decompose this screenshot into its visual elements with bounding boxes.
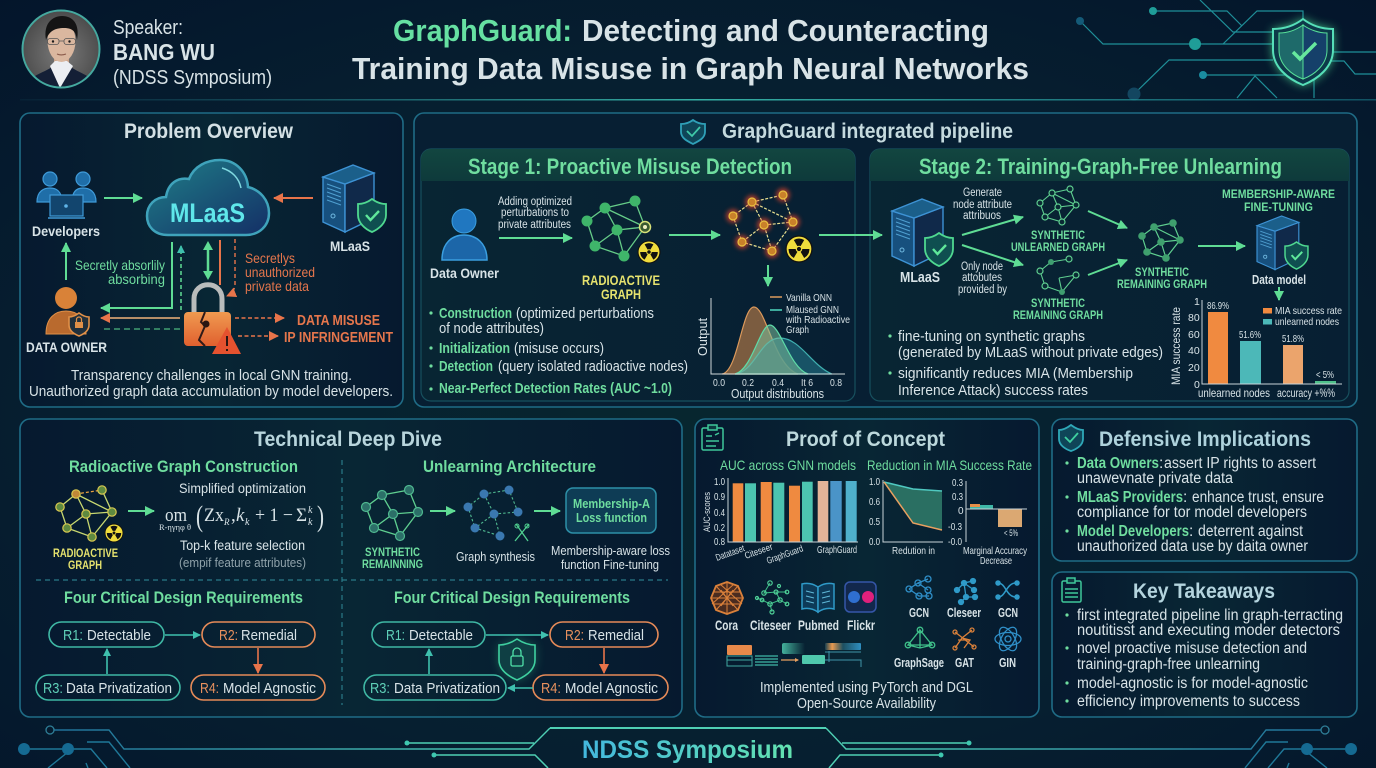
chart: synthetic unlearned graph <box>1037 186 1079 225</box>
label: synthetic remaining: REMAINNING <box>362 557 423 571</box>
icon: defensive shield <box>1059 425 1083 451</box>
icon: developers <box>37 172 96 218</box>
icon: GAT <box>953 628 976 650</box>
formula: om <box>165 505 187 526</box>
panel: defensive implications <box>1052 419 1357 561</box>
heading: radioactive graph construction: Radioactive Graph Construction <box>69 457 298 476</box>
text: only node attributes <box>958 261 1007 296</box>
text: problem summary: Unauthorized graph data accumulation by model developers. <box>29 383 393 400</box>
chart: marginal accuracy: 0.3 <box>952 492 963 503</box>
header circuit decoration <box>1076 0 1376 100</box>
label: MLaaS server: MLaaS <box>330 238 370 254</box>
pill: R3 right: R3: <box>370 680 390 697</box>
pill: R3 right <box>364 675 506 700</box>
formula: k <box>236 505 245 526</box>
label: secretly unauthorized: Secretlys <box>245 250 295 266</box>
chart: synthetic remaining graph lower <box>1037 256 1079 295</box>
box: membership loss function <box>566 488 656 533</box>
chart: MIA success rate bars: unlearned nodes <box>1275 316 1339 328</box>
text: implementation note: Open-Source Availability <box>797 695 936 712</box>
text: top-k feature selection: (empif feature attributes) <box>179 556 306 570</box>
text: stage 2 bullets: Inference Attack) success rates <box>898 382 1088 399</box>
label: data owner: DATA OWNER <box>26 339 107 355</box>
label: developers: Developers <box>32 223 100 239</box>
chart: MIA success rate bars: 86.9% <box>1207 300 1229 312</box>
box: membership loss function: Loss function <box>576 510 647 525</box>
label: synthetic remaining graph lower: SYNTHETIC <box>1031 296 1085 310</box>
arrow: graph to formula <box>128 510 154 512</box>
title: GraphGuard: <box>393 13 572 48</box>
labels: models bottom <box>894 656 1016 670</box>
label: radioactive graph <box>582 272 660 302</box>
icon: data owner <box>46 287 89 336</box>
text: stage 1 bullets: Construction <box>439 305 512 322</box>
label: data owner: Data Owner <box>430 265 499 281</box>
label: synthetic remaining graph lower <box>1013 296 1103 322</box>
text: stage 2 bullets: fine-tuning on synthetic graphs <box>898 328 1085 345</box>
pill: R2 right: R2: <box>565 627 584 644</box>
text: generate node attribute: attribuos <box>963 210 1001 222</box>
arrow: stage 1 to stage 2 <box>819 234 882 236</box>
text: stage 1 bullets: (query isolated radioactive nodes) <box>498 358 688 375</box>
chart: radioactive graph small <box>56 486 123 542</box>
text: generate node attribute: node attribute <box>953 199 1012 211</box>
chart: MIA reduction lines: 0.6 <box>869 497 880 508</box>
arrow: to fine tuning <box>1198 245 1245 247</box>
chart: output distributions: Mlaused GNN <box>786 304 839 316</box>
text: problem summary <box>29 367 393 400</box>
heading: AUC chart: AUC across GNN models <box>720 457 856 473</box>
chart: output distributions: 0.8 <box>830 377 842 389</box>
text: stage 1 bullets: Near-Perfect Detection Rates (AUC ~1.0) <box>439 380 672 397</box>
panel: key takeaways <box>1052 572 1357 717</box>
chart: AUC bars: 0.2 <box>714 523 725 534</box>
label: synthetic unlearned graph: UNLEARNED GRAPH <box>1011 240 1105 254</box>
chart: output distributions: 0.0 <box>713 377 725 389</box>
text: takeaway bullets: training-graph-free unlearning <box>1077 656 1260 673</box>
text: stage 2 bullets <box>888 328 1163 399</box>
icon: MLaaS cloud <box>147 160 269 235</box>
heading: problem overview: Problem Overview <box>124 120 294 143</box>
chart: synthetic remaining graph merged <box>1138 219 1184 262</box>
icon: MLaaS cloud: MLaaS <box>170 198 245 228</box>
pill: R4 right <box>533 675 668 700</box>
panel: integrated pipeline <box>414 113 1357 407</box>
pill: R1 right: Detectable <box>409 627 473 644</box>
label: secretly unauthorized: private data <box>245 278 309 294</box>
text: implementation note <box>760 679 973 712</box>
chart: AUC bars: 0.9 <box>714 492 725 503</box>
labels: models bottom: GraphSage <box>894 656 944 670</box>
text: defensive bullets: compliance for tor model developers <box>1077 504 1307 521</box>
icon: GCN 1 <box>906 576 932 599</box>
icon: Pubmed <box>802 583 834 612</box>
arrow: graph to chart <box>767 265 769 286</box>
pill: R2 <box>202 622 315 647</box>
chart: triggered radioactive graph <box>726 188 812 262</box>
pill: R2: R2: <box>219 627 238 644</box>
text: defensive bullets: deterrent against <box>1198 523 1304 540</box>
text: stage 1 bullets: of node attributes) <box>439 320 544 337</box>
label: secretly absorbing: Secretly absorlily <box>75 257 165 273</box>
chart: MIA success rate bars: 51.6% <box>1239 329 1261 341</box>
text: defensive bullets: : <box>1183 489 1187 506</box>
chart: AUC bars <box>702 477 858 567</box>
pill: R4: Model Agnostic <box>223 680 316 697</box>
panel: problem overview <box>20 113 403 407</box>
text: defensive bullets: : <box>1159 455 1163 472</box>
pill: R4 right: Model Agnostic <box>565 680 658 697</box>
formula: + 1 − <box>255 505 293 526</box>
text: only node attributes: Only node <box>961 261 1003 273</box>
chart: output distributions <box>696 292 850 401</box>
title: Detecting and Counteracting <box>582 13 989 48</box>
formula <box>159 500 324 533</box>
chart: MIA success rate bars: 80 <box>1188 312 1200 324</box>
chart: AUC bars: 0.4 <box>714 508 725 519</box>
label: misuse outcomes <box>284 313 393 346</box>
chart: graph synthesis <box>464 486 529 541</box>
chart: synthetic remaining graph architecture <box>362 486 422 540</box>
label: synthetic remaining graph merged: REMAINING GRAPH <box>1117 277 1207 291</box>
icon: pipeline shield <box>681 120 705 144</box>
icon: GraphSage <box>905 627 935 648</box>
pill: R1: Detectable <box>87 627 151 644</box>
label: data model: Data model <box>1252 272 1306 287</box>
labels: models top: GCN <box>998 606 1018 620</box>
icon: key takeaways clipboard <box>1062 578 1081 602</box>
chart: MIA success rate bars: 60 <box>1188 329 1200 341</box>
text: adding perturbations: Adding optimized <box>498 196 572 208</box>
label: secretly unauthorized: unauthorized <box>245 264 315 280</box>
text: defensive bullets: assert IP rights to assert <box>1164 455 1317 472</box>
arrows: left flow <box>107 635 258 674</box>
icon: clipboard <box>702 425 723 450</box>
chart: AUC bars: 1.0 <box>714 477 725 488</box>
heading: pipeline: GraphGuard integrated pipeline <box>722 120 1013 143</box>
arrow: developers to cloud <box>104 197 142 199</box>
panel: stage 1 <box>421 149 855 401</box>
pill: R2 right: Remedial <box>588 627 644 644</box>
pill: R3: Data Privatization <box>66 680 172 697</box>
label: radioactive graph small: GRAPH <box>68 558 102 572</box>
label: radioactive graph: RADIOACTIVE <box>582 272 660 288</box>
arrow: server to cloud <box>274 197 313 199</box>
chart: marginal accuracy: 0.3 <box>952 478 963 489</box>
chart: MIA reduction lines: 0.5 <box>869 517 880 528</box>
footer banner <box>18 726 1357 768</box>
labels: models bottom: GIN <box>999 656 1016 670</box>
pill: R3: R3: <box>43 680 63 697</box>
arrow: owner to developers <box>65 243 67 280</box>
label: membership-aware fine-tuning <box>1222 187 1335 214</box>
icon: lock shield <box>499 639 535 680</box>
text: generate node attribute: Generate <box>963 187 1002 199</box>
pill: R1 right <box>372 622 485 647</box>
chart: output distributions: Graph <box>786 324 809 336</box>
label: radioactive graph small <box>53 546 118 572</box>
text: stage 2 bullets: (generated by MLaaS without private edges) <box>898 344 1163 361</box>
labels: datasets: Citeseer <box>750 617 791 633</box>
chart: MIA success rate bars: MIA success rate <box>1275 305 1342 317</box>
arrow: to graph synthesis <box>430 510 455 512</box>
label: synthetic remaining graph merged: SYNTHETIC <box>1135 265 1189 279</box>
pill: R2: Remedial <box>241 627 297 644</box>
icon: Cora <box>711 582 743 614</box>
pill: R1 right: R1: <box>386 627 405 644</box>
chart: MIA success rate bars: MIA success rate <box>1171 307 1183 385</box>
text: defensive bullets <box>1065 455 1324 555</box>
heading: unlearning architecture: Unlearning Architecture <box>423 457 596 476</box>
label: radioactive graph small: RADIOACTIVE <box>53 546 118 560</box>
heading: stage 1: Stage 1: Proactive Misuse Detection <box>468 154 792 179</box>
chart: output distributions: 0.2 <box>742 377 754 389</box>
formula: R-ηγηφ θ <box>159 523 191 532</box>
chart: MIA success rate bars: unlearned nodes <box>1198 386 1270 400</box>
chart: marginal accuracy <box>948 478 1028 567</box>
label: secretly absorbing: absorbing <box>108 271 165 287</box>
text: stage 1 bullets: Detection <box>439 358 493 375</box>
chart: radioactive graph <box>582 196 660 263</box>
formula: k <box>308 505 313 516</box>
arrows: cloud and lock flows <box>100 239 235 329</box>
icon: MLaaS server <box>892 199 953 266</box>
chart: AUC bars: GraphGuard <box>817 544 857 556</box>
formula: Zx <box>204 505 224 526</box>
label: misuse outcomes: IP INFRINGEMENT <box>284 330 393 346</box>
label: synthetic remaining graph lower: REMAINING GRAPH <box>1013 308 1103 322</box>
icon: broken lock <box>184 285 241 354</box>
chart: output distributions: Vanilla ONN <box>786 292 832 304</box>
text: defensive bullets: Model Developers <box>1077 523 1189 540</box>
chart: AUC bars: Datataset <box>714 543 746 564</box>
text: takeaway bullets: noutitisst and executing moder detectors <box>1077 622 1340 639</box>
label: radioactive graph: GRAPH <box>601 286 641 302</box>
speaker photo <box>22 10 100 92</box>
text: defensive bullets: unauthorized data use by daita owner <box>1077 538 1308 555</box>
chart: output distributions: Output <box>696 317 710 356</box>
speaker text: BANG WU <box>113 39 215 65</box>
label: membership-aware fine-tuning: MEMBERSHIP-AWARE <box>1222 187 1335 201</box>
chart: MIA reduction lines: 0.0 <box>869 537 880 548</box>
labels: datasets: Cora <box>715 617 738 633</box>
chart: MIA success rate bars: 0 <box>1194 379 1200 391</box>
label: synthetic remaining <box>362 545 423 571</box>
text: stage 1 bullets <box>429 305 688 397</box>
chart: marginal accuracy: < 5% <box>1004 528 1018 538</box>
chart: MIA success rate bars: < 5% <box>1316 369 1334 381</box>
text: takeaway bullets <box>1065 607 1343 710</box>
formula: k <box>245 517 250 528</box>
pill: R4 right: R4: <box>541 680 561 697</box>
label: MLaaS: MLaaS <box>900 269 940 286</box>
labels: models top <box>909 606 1018 620</box>
chart: MIA reduction lines <box>869 477 943 557</box>
label: misuse outcomes: DATA MISUSE <box>297 313 380 329</box>
chart: output distributions: 0.4 <box>772 377 784 389</box>
arrows: right flow <box>429 635 604 688</box>
chart: MIA success rate bars: 40 <box>1188 345 1200 357</box>
text: top-k feature selection <box>179 538 306 570</box>
arrow: owner to graph <box>499 237 572 239</box>
chart: marginal accuracy: -0.0 <box>948 537 962 548</box>
chart: MIA reduction lines: Redution in <box>892 545 935 557</box>
label: secretly absorbing <box>75 257 165 287</box>
labels: models top: GCN <box>909 606 929 620</box>
heading: requirements left: Four Critical Design Requirements <box>64 588 303 607</box>
pill: R3 <box>36 675 180 700</box>
text: stage 1 bullets: Initialization <box>439 340 510 357</box>
text: membership-aware loss: function Fine-tuning <box>561 557 659 572</box>
text: takeaway bullets: efficiency improvements to success <box>1077 693 1300 710</box>
label: synthetic unlearned graph: SYNTHETIC <box>1031 228 1085 242</box>
labels: models bottom: GAT <box>955 656 974 670</box>
chart: MIA success rate bars: 1 <box>1194 296 1200 308</box>
icon: data model server <box>1257 216 1308 270</box>
chart: MIA success rate bars: accuracy +%% <box>1277 386 1335 400</box>
pill: R1 <box>49 622 164 647</box>
chart: marginal accuracy: Marginal Accuracy <box>963 545 1028 557</box>
icon: Flickr <box>845 582 876 612</box>
label: synthetic remaining graph merged <box>1117 265 1207 291</box>
heading: defensive implications: Defensive Implications <box>1099 428 1311 451</box>
chart: marginal accuracy: -0.3 <box>948 522 962 533</box>
text: adding perturbations: private attributes <box>498 219 571 231</box>
text: stage 1 bullets: (misuse occurs) <box>514 340 604 357</box>
speaker text <box>113 17 272 89</box>
labels: models top: Cleseer <box>947 606 981 620</box>
footer text: NDSS Symposium <box>582 736 793 764</box>
heading: stage 2: Stage 2: Training-Graph-Free Unlearning <box>919 154 1282 179</box>
heading: technical deep dive: Technical Deep Dive <box>254 428 442 451</box>
chart: marginal accuracy: 0 <box>958 506 964 517</box>
text: takeaway bullets: model-agnostic is for model-agnostic <box>1077 675 1308 692</box>
label: synthetic unlearned graph <box>1011 228 1105 254</box>
labels: datasets: Flickr <box>847 617 875 633</box>
text: stage 2 bullets: significantly reduces MIA (Membership <box>898 365 1133 382</box>
icon: MLaaS server <box>323 165 386 232</box>
text: adding perturbations <box>498 196 572 231</box>
formula: R <box>223 517 230 527</box>
text: problem summary: Transparency challenges in local GNN training. <box>71 367 352 384</box>
arrow: to loss function <box>534 510 560 512</box>
text: takeaway bullets: first integrated pipeline lin graph-terracting <box>1077 607 1343 624</box>
title <box>352 13 1029 86</box>
text: only node attributes: provided by <box>958 284 1007 296</box>
formula: k <box>308 517 313 528</box>
chart: AUC bars: 0.8 <box>714 537 725 548</box>
formula: ) <box>317 500 324 533</box>
icon: GCN 2 <box>996 581 1019 599</box>
label: membership-aware fine-tuning: FINE-TUNING <box>1244 200 1313 214</box>
heading: key takeaways: Key Takeaways <box>1133 580 1275 603</box>
arrows: server to synthetic graphs <box>962 217 1023 265</box>
speaker text: Speaker: <box>113 17 183 39</box>
labels: datasets: Pubmed <box>798 617 839 633</box>
pill: R3 right: Data Privatization <box>394 680 500 697</box>
chart: marginal accuracy: Decrease <box>980 555 1012 567</box>
text: only node attributes: attobutes <box>962 272 1002 284</box>
text: membership-aware loss: Membership-aware loss <box>551 543 670 558</box>
label: synthetic remaining: SYNTHETIC <box>365 545 420 559</box>
text: top-k feature selection: Top-k feature selection <box>180 538 305 553</box>
chart: output distributions: It 6 <box>801 377 813 389</box>
arrows: misuse outcomes <box>235 318 284 336</box>
chart: output distributions: Output distributions <box>731 387 824 401</box>
heading: requirements right: Four Critical Design Requirements <box>394 588 630 607</box>
heading: reduction chart: Reduction in MIA Success Rate <box>867 457 1032 473</box>
chart: MIA reduction lines: 1.0 <box>869 477 880 488</box>
text: adding perturbations: perturbations to <box>501 207 569 219</box>
chart: AUC bars: GraphGuard <box>765 543 805 567</box>
title: Training Data Misuse in Graph Neural Networks <box>352 51 1029 86</box>
text: defensive bullets: MLaaS Providers <box>1077 489 1183 506</box>
chart: output distributions: with Radioactive <box>785 314 850 326</box>
text: membership-aware loss <box>551 543 670 572</box>
chart: MIA success rate bars: 20 <box>1188 362 1200 374</box>
text: defensive bullets: : <box>1189 523 1193 540</box>
pill: R4: R4: <box>200 680 219 697</box>
label: secretly unauthorized <box>245 250 315 294</box>
arrow: to triggered graph <box>669 234 720 236</box>
icon: header shield <box>1273 19 1333 85</box>
formula: ( <box>196 500 203 533</box>
chart: AUC bars: Citeseer <box>743 542 774 562</box>
text: stage 1 bullets: (optimized perturbations <box>516 305 654 322</box>
panel: proof of concept <box>695 419 1039 717</box>
icon: Citeseer <box>756 581 789 614</box>
text: defensive bullets: enhance trust, ensure <box>1192 489 1324 506</box>
icon: Cleseer <box>954 578 978 604</box>
text: implementation note: Implemented using PyTorch and DGL <box>760 679 973 696</box>
diagram: implementation pipeline <box>727 643 861 667</box>
icon: data owner person <box>442 209 487 260</box>
flow: requirements left <box>36 622 325 700</box>
text: simplified optimization: Simplified optimization <box>179 481 306 496</box>
panel: stage 2 <box>870 149 1349 401</box>
icon: GIN <box>995 624 1021 654</box>
formula: , <box>231 505 236 526</box>
speaker text: (NDSS Symposium) <box>113 67 272 89</box>
pill: R4 <box>191 675 325 700</box>
chart: MIA success rate bars <box>1171 296 1342 400</box>
chart: AUC bars: AUC-scores <box>702 492 713 532</box>
text: generate node attribute <box>953 187 1012 222</box>
flow: requirements right <box>364 622 668 700</box>
arrow: model to chart <box>1278 287 1280 300</box>
text: defensive bullets: Data Owners <box>1077 455 1159 472</box>
box: membership loss function: Membership-A <box>573 496 651 511</box>
text: takeaway bullets: novel proactive misuse detection and <box>1077 640 1307 657</box>
panel: technical deep dive <box>20 419 682 717</box>
label: graph synthesis: Graph synthesis <box>456 549 535 564</box>
labels: datasets <box>715 617 875 633</box>
arrows: graphs to merged graph <box>1088 211 1127 275</box>
heading: proof of concept: Proof of Concept <box>786 428 945 451</box>
text: defensive bullets: unawevnate private data <box>1077 470 1233 487</box>
pill: R1: R1: <box>63 627 83 644</box>
formula: Σ <box>296 505 307 526</box>
chart: MIA success rate bars: 51.8% <box>1282 333 1304 345</box>
pill: R2 right <box>550 622 658 647</box>
